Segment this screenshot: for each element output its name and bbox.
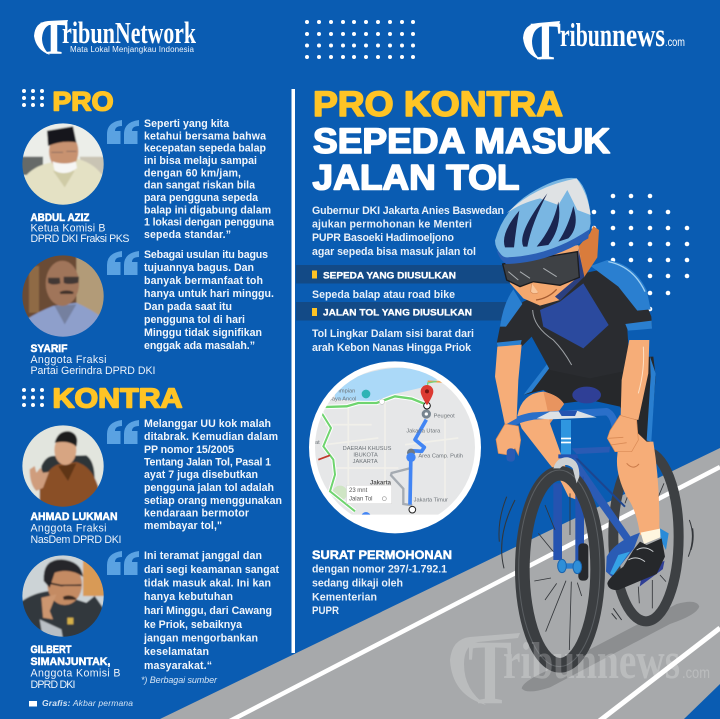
logo: Tribunnews.com: ribun bbox=[560, 18, 612, 54]
shorts and legs bbox=[517, 357, 656, 500]
quote text: Gilbert Simanjuntak: hanya kebutuhan bbox=[144, 591, 233, 603]
quote text: Gilbert Simanjuntak: dari segi keamanan sangat bbox=[144, 564, 279, 576]
quote mark 1 bbox=[107, 120, 139, 144]
text: rute tol: arah Kebon Nanas Hingga Priok bbox=[312, 342, 471, 354]
band: jalan tol yang diusulkan: JALAN TOL YANG DIUSULKAN bbox=[323, 308, 472, 318]
logo: Tribunnews.com: .com bbox=[665, 35, 685, 49]
logo: TribunNetwork: T bbox=[40, 12, 68, 65]
photo: Syarif bbox=[22, 255, 104, 337]
column divider bbox=[292, 89, 295, 653]
map circle: 23 mnt bbox=[349, 488, 368, 494]
road bbox=[160, 448, 720, 719]
quote text: Syarif: tujuannya bagus. Dan bbox=[144, 262, 254, 274]
map circle: Impian bbox=[338, 389, 355, 395]
map circle: Jalan Tol bbox=[349, 496, 373, 502]
quote text: Gilbert Simanjuntak: masyarakat.“ bbox=[144, 660, 212, 672]
quote text: Gilbert Simanjuntak: Ini teramat janggal dan bbox=[144, 550, 262, 562]
name: Syarif: Anggota Fraksi bbox=[30, 354, 106, 366]
quote text: Syarif: enggak ada masalah.” bbox=[144, 340, 255, 352]
name: Syarif bbox=[30, 343, 156, 377]
quote text: Abdul Aziz: Seperti yang kita bbox=[144, 118, 229, 130]
name: Gilbert Simanjuntak: DPRD DKI bbox=[30, 679, 76, 691]
source note: *) Berbagai sumber bbox=[141, 675, 218, 685]
logo: TribunNetwork: Network bbox=[115, 15, 197, 50]
intro text: ajukan permohonan ke Menteri bbox=[312, 218, 472, 230]
quote text: Gilbert Simanjuntak: hari Minggu, dari Cawang bbox=[144, 605, 272, 617]
map circle: Jakarta Timur bbox=[414, 498, 448, 504]
quote text: Syarif bbox=[144, 249, 274, 352]
quote text: Abdul Aziz: ketahui bersama bahwa bbox=[144, 130, 266, 142]
quote text: Gilbert Simanjuntak: tidak masuk akal. Ini kan bbox=[144, 578, 271, 590]
quote text: Abdul Aziz: para pengguna sepeda bbox=[144, 192, 258, 204]
logo: Tribunnews.com: T bbox=[530, 11, 561, 71]
name: Gilbert Simanjuntak: SIMANJUNTAK, bbox=[30, 656, 111, 668]
surat permohonan: PUPR bbox=[312, 605, 339, 617]
name: Abdul Aziz: ABDUL AZIZ bbox=[30, 212, 90, 224]
name: Abdul Aziz bbox=[30, 212, 130, 245]
quote text: Syarif: Sebagai usulan itu bagus bbox=[144, 249, 268, 261]
name: Abdul Aziz: DPRD DKI Fraksi PKS bbox=[30, 233, 130, 245]
title bbox=[312, 85, 610, 198]
arms and hands bbox=[495, 340, 649, 462]
quote text: Gilbert Simanjuntak bbox=[143, 550, 279, 672]
bike shadow and rear wheel bbox=[522, 452, 699, 691]
logo: TribunNetwork: ribun bbox=[62, 15, 115, 50]
frame and fork bbox=[553, 387, 632, 563]
quote text: Ahmad Lukman: ayat 7 juga disebutkan bbox=[144, 469, 258, 481]
name: Abdul Aziz: Ketua Komisi B bbox=[30, 222, 106, 234]
quote text: Abdul Aziz: kecepatan sepeda balap bbox=[144, 143, 267, 155]
quote text: Gilbert Simanjuntak: jangan mengorbankan bbox=[143, 632, 258, 644]
map circle: IBUKOTA bbox=[353, 453, 378, 459]
text: rute tol: Tol Lingkar Dalam sisi barat dari bbox=[312, 328, 474, 340]
map circle: at bbox=[315, 440, 320, 446]
quote text: Syarif: pengguna tol di hari bbox=[144, 314, 245, 326]
quote mark 3 bbox=[107, 420, 139, 444]
map circle: Peugeot bbox=[434, 414, 455, 420]
quote text: Gilbert Simanjuntak: ke Priok, sebaiknya bbox=[144, 619, 242, 631]
photo: Abdul Aziz bbox=[22, 123, 104, 205]
map circle: Jaya Ancol bbox=[329, 396, 356, 402]
watermark bbox=[450, 621, 710, 719]
quote text: Ahmad Lukman: Tentang Jalan Tol, Pasal 1 bbox=[144, 456, 271, 468]
name: Ahmad Lukman bbox=[30, 511, 122, 546]
name: Gilbert Simanjuntak: Anggota Komisi B bbox=[30, 668, 120, 680]
name: Syarif: Partai Gerindra DPRD DKI bbox=[30, 365, 156, 377]
map circle bbox=[305, 358, 485, 538]
quote text: Ahmad Lukman: setiap orang menggunakan bbox=[144, 495, 282, 507]
pedal and shoe bbox=[606, 528, 669, 590]
quote text: Syarif: hanya untuk hari minggu. bbox=[144, 288, 274, 300]
map circle: Jakarta bbox=[370, 481, 392, 487]
head and helmet bbox=[495, 178, 599, 306]
quote text: Abdul Aziz: 1 lokasi dengan pengguna bbox=[144, 217, 274, 229]
illustration: cyclist bbox=[495, 178, 699, 691]
photo: Gilbert Simanjuntak bbox=[22, 555, 104, 637]
photo: Ahmad Lukman bbox=[22, 425, 104, 507]
quote text: Abdul Aziz: sepeda standar.” bbox=[144, 229, 231, 241]
front wheel bbox=[499, 470, 693, 667]
intro text: Gubernur DKI Jakarta Anies Baswedan bbox=[312, 205, 504, 217]
quote text: Abdul Aziz bbox=[144, 118, 274, 241]
name: Ahmad Lukman: Anggota Fraksi bbox=[30, 522, 106, 534]
name: Ahmad Lukman: NasDem DPRD DKI bbox=[30, 534, 122, 546]
logo: TribunNetwork bbox=[34, 12, 197, 65]
intro text: agar sepeda bisa masuk jalan tol bbox=[312, 246, 476, 258]
intro text bbox=[312, 205, 504, 258]
name: Syarif: SYARIF bbox=[30, 343, 68, 355]
name: Gilbert Simanjuntak bbox=[30, 644, 120, 691]
name: Gilbert Simanjuntak: GILBERT bbox=[30, 644, 72, 656]
band: sepeda yang diusulkan: SEPEDA YANG DIUSULKAN bbox=[323, 270, 456, 282]
surat permohonan: sedang dikaji oleh bbox=[312, 578, 403, 590]
quote text: Syarif: Minggu tidak signifikan bbox=[144, 327, 262, 339]
heading: KONTRA: KONTRA bbox=[52, 382, 182, 414]
quote text: Abdul Aziz: dan sangat riskan bila bbox=[144, 180, 255, 192]
fork crown and handlebar bbox=[507, 411, 616, 483]
heading: PRO: PRO bbox=[52, 86, 114, 116]
quote text: Ahmad Lukman: PP nomor 15/2005 bbox=[144, 444, 234, 456]
intro text: PUPR Basoeki Hadimoeljono bbox=[312, 232, 455, 244]
quote text: Abdul Aziz: dengan 60 km/jam, bbox=[144, 167, 241, 179]
quote text: Ahmad Lukman: pengguna jalan tol adalah bbox=[144, 482, 274, 494]
quote text: Ahmad Lukman: membayar tol," bbox=[144, 520, 222, 532]
text: rute tol bbox=[312, 328, 474, 354]
surat permohonan: SURAT PERMOHONAN bbox=[312, 548, 452, 562]
quote mark 4 bbox=[107, 551, 139, 575]
quote text: Abdul Aziz: balap ini digabung dalam bbox=[144, 204, 271, 216]
map circle: JAKARTA bbox=[353, 459, 378, 465]
right dot pattern bbox=[592, 194, 689, 311]
title: PRO KONTRA bbox=[313, 85, 563, 124]
title: JALAN TOL bbox=[312, 158, 520, 198]
map circle: Area Camp. Putih bbox=[418, 454, 463, 460]
quote text: Ahmad Lukman: kendaraan bermotor bbox=[144, 508, 249, 520]
logo: Tribunnews.com bbox=[523, 11, 685, 71]
torso bbox=[497, 260, 652, 378]
quote text: Syarif: Dan pada saat itu bbox=[144, 301, 232, 313]
quote text: Syarif: banyak bermanfaat toh bbox=[144, 275, 263, 287]
watermark: .com bbox=[682, 665, 710, 682]
icon: PRO dots bbox=[22, 89, 44, 107]
name: Ahmad Lukman: AHMAD LUKMAN bbox=[30, 511, 118, 523]
credit: Grafis: Akbar permana bbox=[42, 698, 133, 708]
right leg bbox=[617, 417, 662, 544]
surat permohonan: Kementerian bbox=[312, 592, 377, 604]
band: sepeda yang diusulkan bbox=[296, 265, 511, 284]
logo: Tribunnews.com: news bbox=[612, 18, 665, 54]
logo: TribunNetwork: Mata Lokal Menjangkau Indonesia bbox=[70, 45, 195, 54]
map circle: DAERAH KHUSUS bbox=[343, 446, 392, 452]
map circle: Jakarta Utara bbox=[406, 429, 441, 435]
surat permohonan bbox=[312, 548, 452, 617]
quote text: Ahmad Lukman bbox=[144, 418, 282, 532]
quote text: Gilbert Simanjuntak: keselamatan bbox=[144, 646, 209, 658]
title: SEPEDA MASUK bbox=[313, 122, 610, 161]
quote text: Ahmad Lukman: ditabrak. Kemudian dalam bbox=[144, 431, 278, 443]
quote text: Ahmad Lukman: Melanggar UU kok malah bbox=[144, 418, 271, 430]
top dot pattern bbox=[305, 20, 415, 59]
quote text: Abdul Aziz: ini bisa melaju sampai bbox=[144, 155, 257, 167]
text: sepeda balap: Sepeda balap atau road bike bbox=[312, 289, 455, 301]
quote mark 2 bbox=[107, 251, 139, 275]
band: jalan tol yang diusulkan bbox=[296, 302, 511, 320]
icon: KONTRA dots bbox=[22, 388, 44, 407]
surat permohonan: dengan nomor 297/-1.792.1 bbox=[312, 564, 447, 576]
